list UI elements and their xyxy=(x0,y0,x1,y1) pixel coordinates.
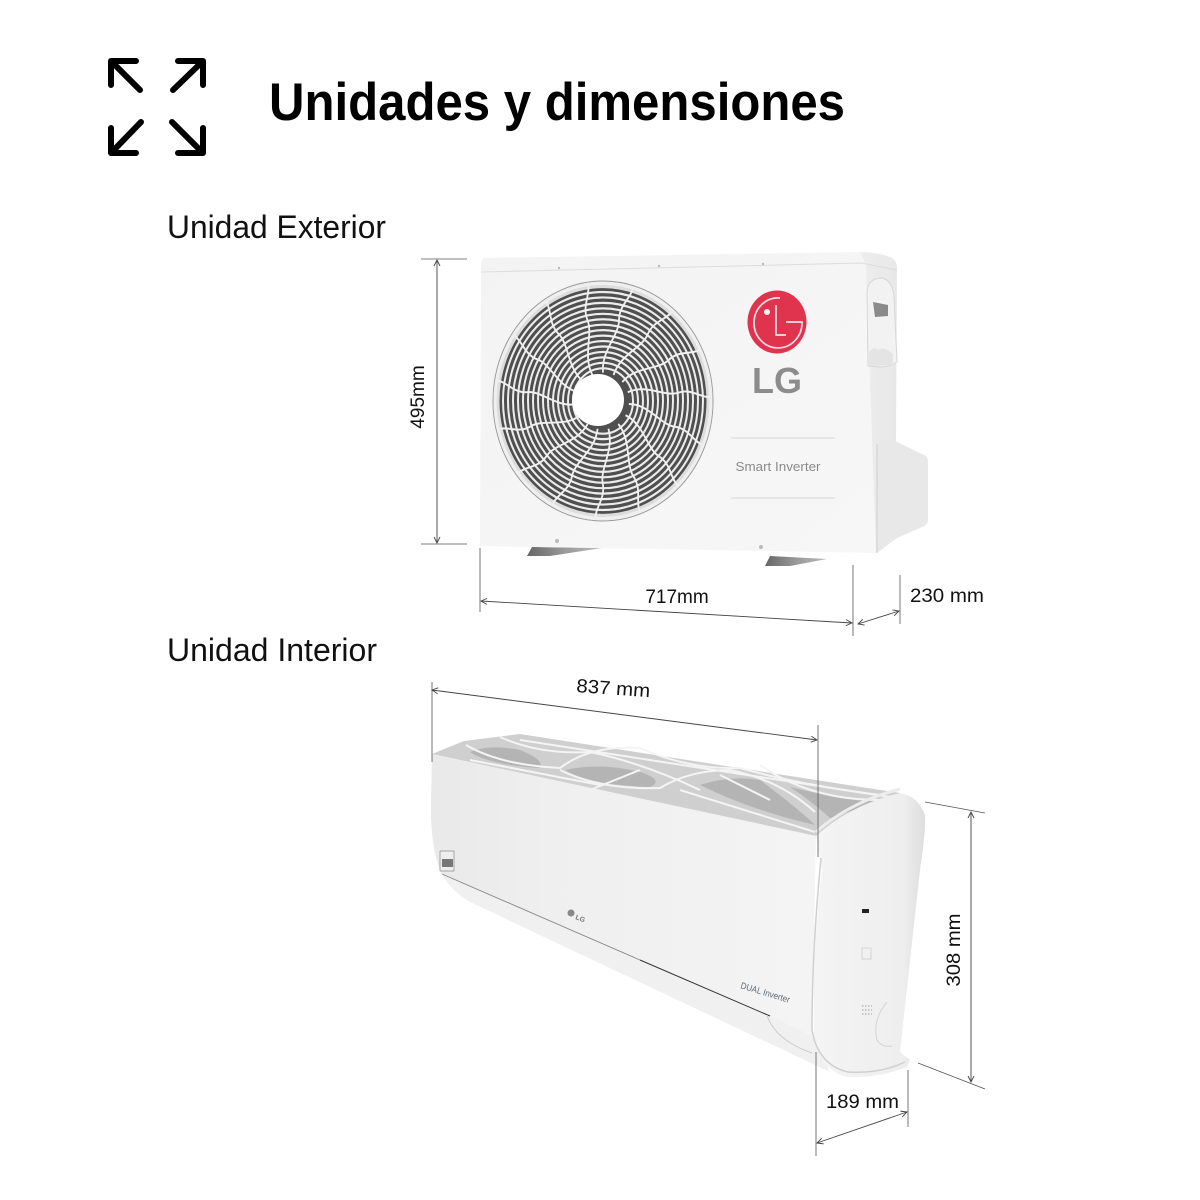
outdoor top screws xyxy=(555,263,764,549)
Smart Inverter badge xyxy=(731,438,835,498)
dimension: 717mm xyxy=(480,548,853,636)
icon: expand arrows xyxy=(111,61,203,153)
heading: outdoor unit: Unidad Exterior xyxy=(167,209,386,245)
title: Unidades y dimensiones xyxy=(269,73,845,132)
fan hub xyxy=(572,374,624,426)
outdoor side handle xyxy=(867,278,897,367)
outdoor pipe cover xyxy=(877,440,928,553)
outdoor unit front face xyxy=(480,252,876,553)
dimension: 230 mm: 230 mm xyxy=(910,586,984,607)
LG wordmark: LG xyxy=(752,360,802,401)
dimension: 495mm xyxy=(408,259,467,544)
Smart Inverter badge: Smart Inverter xyxy=(736,459,821,474)
indoor front panel xyxy=(431,754,816,1040)
dimension: 308 mm: 308 mm xyxy=(944,914,965,986)
side cap speaker holes xyxy=(862,1006,872,1014)
dimension: 308 mm xyxy=(918,802,985,1089)
dimension: 189 mm: 189 mm xyxy=(826,1092,899,1113)
dimension: 837 mm xyxy=(432,676,818,857)
indoor unit illustration xyxy=(431,734,925,1077)
dimension: 495mm: 495mm xyxy=(408,365,429,429)
indoor louvre xyxy=(442,874,830,1072)
outdoor unit illustration xyxy=(480,252,928,566)
outdoor unit side face xyxy=(853,252,897,553)
dimension: 189 mm xyxy=(816,1052,908,1156)
dimension: 230 mm xyxy=(858,575,984,624)
side cap sensor xyxy=(862,909,869,913)
indoor LG mark: LG xyxy=(574,914,586,924)
indoor LG mark xyxy=(568,910,586,924)
LG red logo xyxy=(748,290,806,354)
heading: indoor unit: Unidad Interior xyxy=(167,632,377,668)
indoor label sticker xyxy=(440,851,454,871)
dimension: 717mm: 717mm xyxy=(645,587,709,608)
indoor top filter xyxy=(432,734,900,836)
indoor side cap xyxy=(814,793,925,1077)
DUAL Inverter label: DUAL Inverter xyxy=(739,980,791,1005)
fan guard xyxy=(493,281,713,521)
fan outer ring xyxy=(495,283,711,519)
outdoor unit feet xyxy=(527,547,827,566)
dimension: 837 mm: 837 mm xyxy=(576,676,651,702)
